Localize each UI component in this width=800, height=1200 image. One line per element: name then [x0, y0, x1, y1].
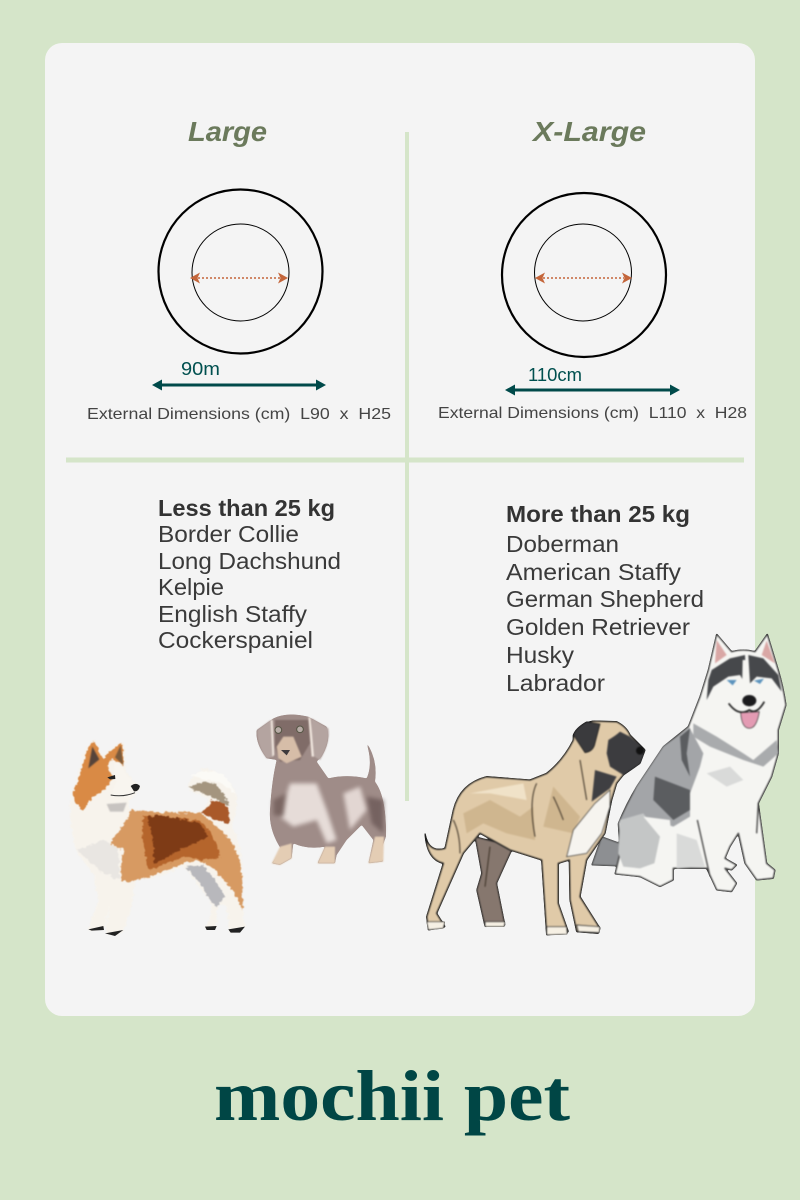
text block: large breeds: German Shepherd	[506, 586, 704, 612]
vertical divider	[405, 132, 409, 801]
illustration: border collie	[69, 740, 245, 936]
illustration: dachshund	[256, 715, 386, 865]
text block: large breeds: American Staffy	[506, 559, 681, 585]
illustration: husky	[592, 634, 786, 892]
panel: main card	[45, 43, 755, 1016]
text block: large breeds: Labrador	[506, 670, 605, 696]
text block: small breeds	[158, 495, 341, 653]
text block: small breeds: Border Collie	[158, 521, 299, 547]
text block: large breeds: Golden Retriever	[506, 614, 690, 640]
label: 90m: 90m	[181, 359, 220, 379]
text block: small breeds: Less than 25 kg	[158, 495, 335, 521]
text: external dimensions large: External Dimensions (cm) L90 x H25	[87, 406, 391, 423]
text: external dimensions x-large: External Dimensions (cm) L110 x H28	[438, 405, 747, 422]
text block: small breeds: Kelpie	[158, 574, 224, 600]
arrow: 110 width	[505, 384, 680, 396]
diagram: x-large bed	[502, 193, 666, 357]
heading: X-Large: X-Large	[531, 116, 646, 147]
text block: large breeds	[506, 501, 704, 696]
heading: Large: Large	[188, 116, 267, 147]
text block: small breeds: Long Dachshund	[158, 548, 341, 574]
text block: small breeds: Cockerspaniel	[158, 627, 313, 653]
illustration: mastiff	[425, 721, 645, 935]
label: 110cm: 110cm	[528, 365, 582, 385]
arrow: 90 width	[152, 380, 326, 390]
text block: large breeds: Husky	[506, 642, 574, 668]
logo: mochii pet: mochii pet	[214, 1056, 570, 1136]
diagram: large bed	[158, 190, 322, 354]
text block: small breeds: English Staffy	[158, 601, 308, 627]
horizontal divider	[66, 458, 744, 462]
text block: large breeds: Doberman	[506, 531, 619, 557]
text block: large breeds: More than 25 kg	[506, 501, 690, 527]
